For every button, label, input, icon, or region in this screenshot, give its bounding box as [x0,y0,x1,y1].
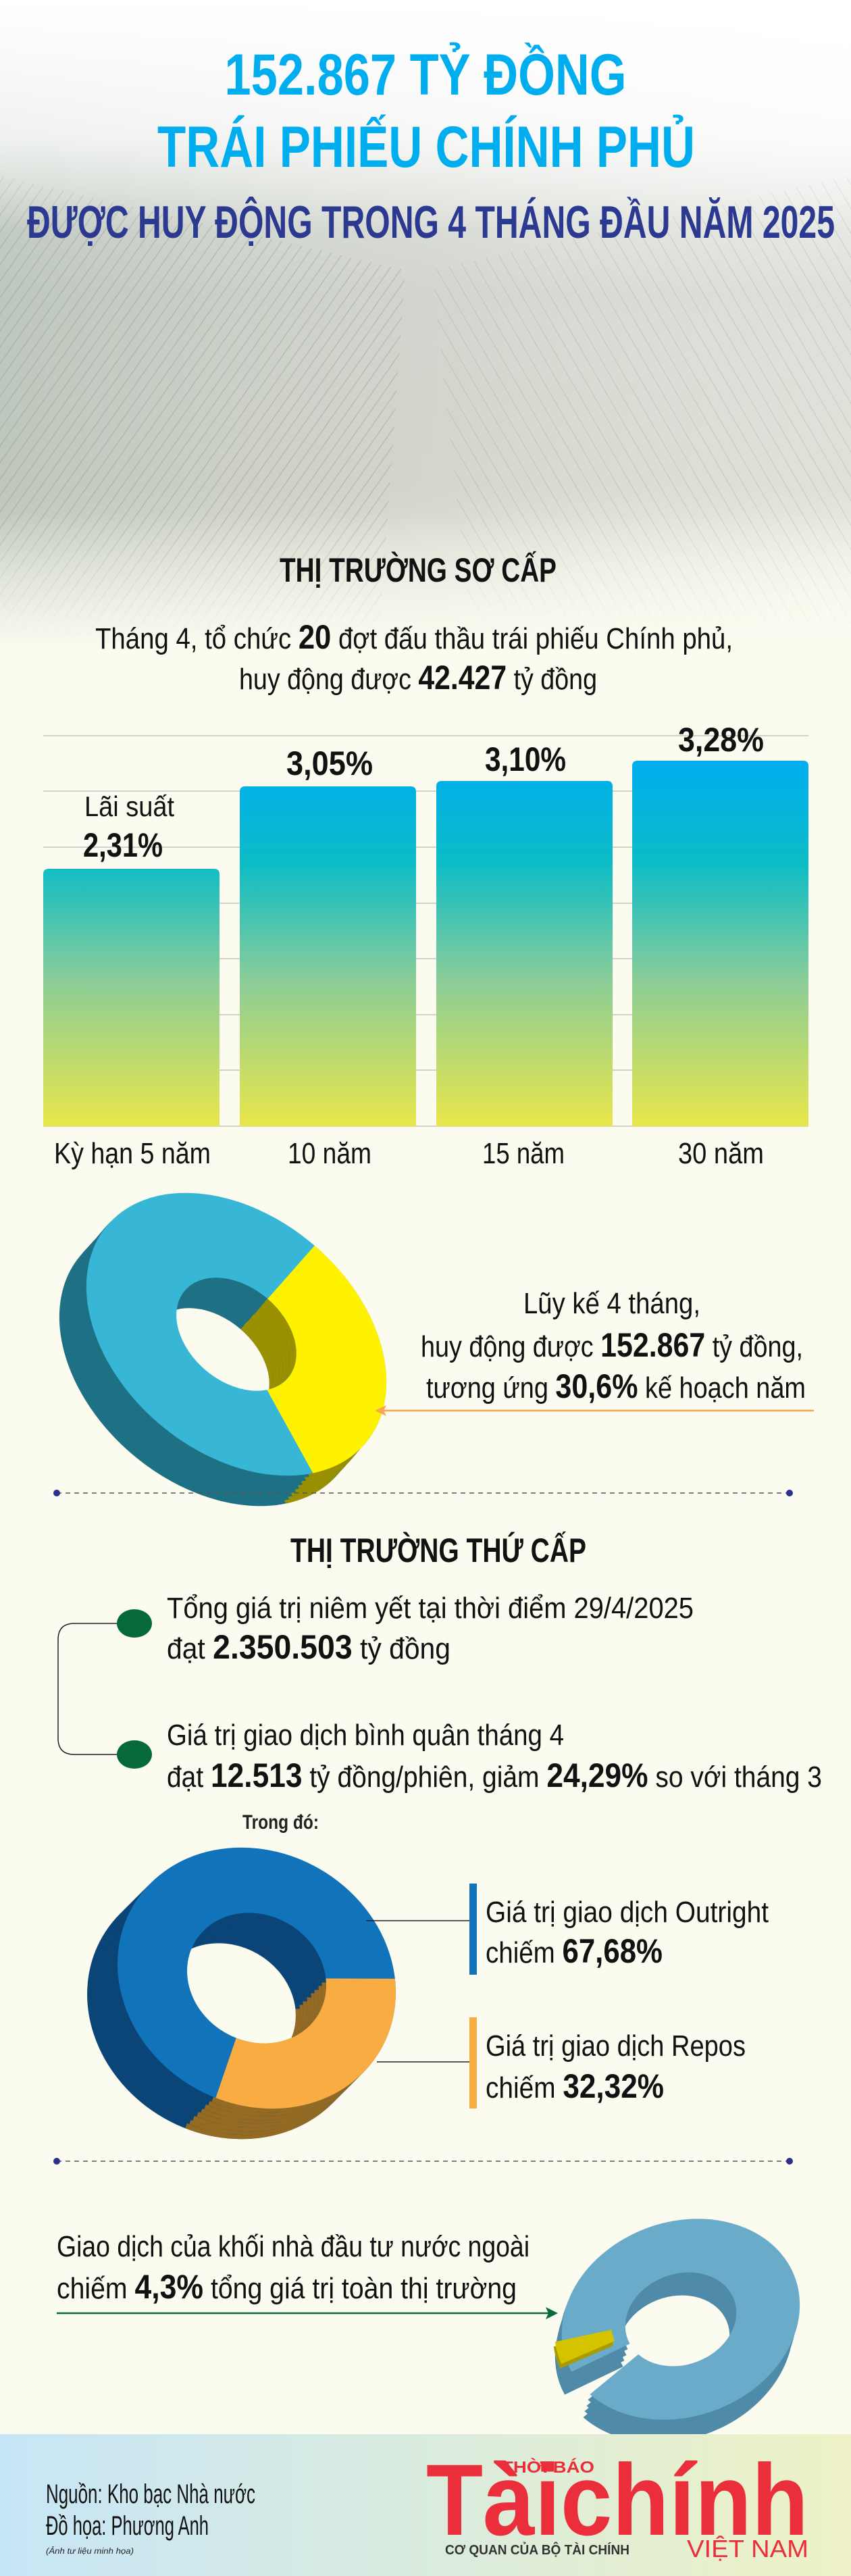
legend: repos [377,2017,746,2108]
credits [46,2479,255,2556]
intro text primary [95,618,733,697]
text: average trading value: Giá trị giao dịch bình quân tháng 4 [167,1719,564,1752]
text: listed value: đạt 2.350.503 tỷ đồng [167,1628,450,1666]
arrow: green pointer [57,2307,558,2319]
donut chart: foreign 4.3% [553,2211,801,2451]
legend: repos: chiếm 32,32% [486,2067,664,2105]
text: listed value: Tổng giá trị niêm yết tại thời điểm 29/4/2025 [167,1592,694,1625]
bar chart: interest rates by term: 2,31% [83,826,163,864]
logo: Thời báo Tài chính: CƠ QUAN CỦA BỘ TÀI CHÍNH [445,2542,629,2558]
footer [0,2434,851,2576]
axis labels: Kỳ hạn 5 năm [54,1137,211,1170]
header photo: money and bonds [0,0,851,649]
logo: Thời báo Tài chính: VIỆT NAM [687,2535,808,2562]
logo: Thời báo Tài chính: Tàichính [426,2443,808,2556]
bar: 5 years [43,869,220,1126]
text: foreign investors: Giao dịch của khối nhà đầu tư nước ngoài [57,2230,530,2263]
intro text primary: huy động được 42.427 tỷ đồng [239,659,597,697]
timeline bullets [58,1592,822,1794]
bar chart: interest rates by term [43,721,808,1170]
arrow: orange pointer to donut [375,1405,814,1416]
credits: Nguồn: Kho bạc Nhà nước [46,2479,255,2509]
legend: outright: chiếm 67,68% [486,1932,663,1970]
value labels: Lãi suất [84,790,174,822]
icon: green dot 2 [117,1740,152,1769]
bar: 15 years [436,781,613,1126]
legend: repos: Giá trị giao dịch Repos [486,2029,746,2063]
text: average trading value [167,1719,822,1794]
credits: Đồ họa: Phương Anh [46,2511,209,2541]
bar chart: interest rates by term: 30 năm [678,1137,764,1170]
text: average trading value: đạt 12.513 tỷ đồng/phiên, giảm 24,29% so với tháng 3 [167,1757,822,1794]
yellow slice [553,2213,785,2426]
title [27,43,835,248]
bar: 30 years [632,761,808,1126]
donut chart: 30.6% of annual plan [63,1192,382,1507]
legend: outright [366,1884,769,1975]
callout: cumulative 4 months: tương ứng 30,6% kế hoạch năm [426,1367,806,1405]
text: listed value [167,1592,694,1666]
bar chart: interest rates by term: 15 năm [482,1137,565,1170]
callout: cumulative 4 months: Lũy kế 4 tháng, [523,1287,700,1320]
callout: cumulative 4 months: huy động được 152.867 tỷ đồng, [421,1326,803,1364]
icon: green dot 1 [117,1609,152,1638]
bar chart: interest rates by term: 10 năm [288,1137,371,1170]
logo: Thời báo Tài chính: THỜI BÁO [502,2458,594,2477]
title: 152.867 TỶ ĐỒNG [224,43,627,107]
bar: 10 years [240,786,416,1126]
text: foreign investors [57,2230,530,2306]
bar chart: interest rates by term: 3,28% [678,721,764,759]
heading: primary market: THỊ TRƯỜNG SƠ CẤP [280,551,557,589]
bar chart: interest rates by term: 3,05% [286,744,373,782]
label: of which: Trong đó: [242,1811,319,1834]
callout: cumulative 4 months [421,1287,806,1405]
title: TRÁI PHIẾU CHÍNH PHỦ [157,115,695,180]
credits: (Ảnh tư liệu minh họa) [46,2546,134,2556]
bar chart: interest rates by term: 3,10% [485,740,566,778]
donut chart: outright vs repos [32,1790,450,2196]
heading: secondary market: THỊ TRƯỜNG THỨ CẤP [290,1532,586,1569]
intro text primary: Tháng 4, tổ chức 20 đợt đấu thầu trái phiếu Chính phủ, [95,618,733,656]
text: foreign investors: chiếm 4,3% tổng giá trị toàn thị trường [57,2268,517,2306]
legend: outright: Giá trị giao dịch Outright [486,1896,769,1929]
